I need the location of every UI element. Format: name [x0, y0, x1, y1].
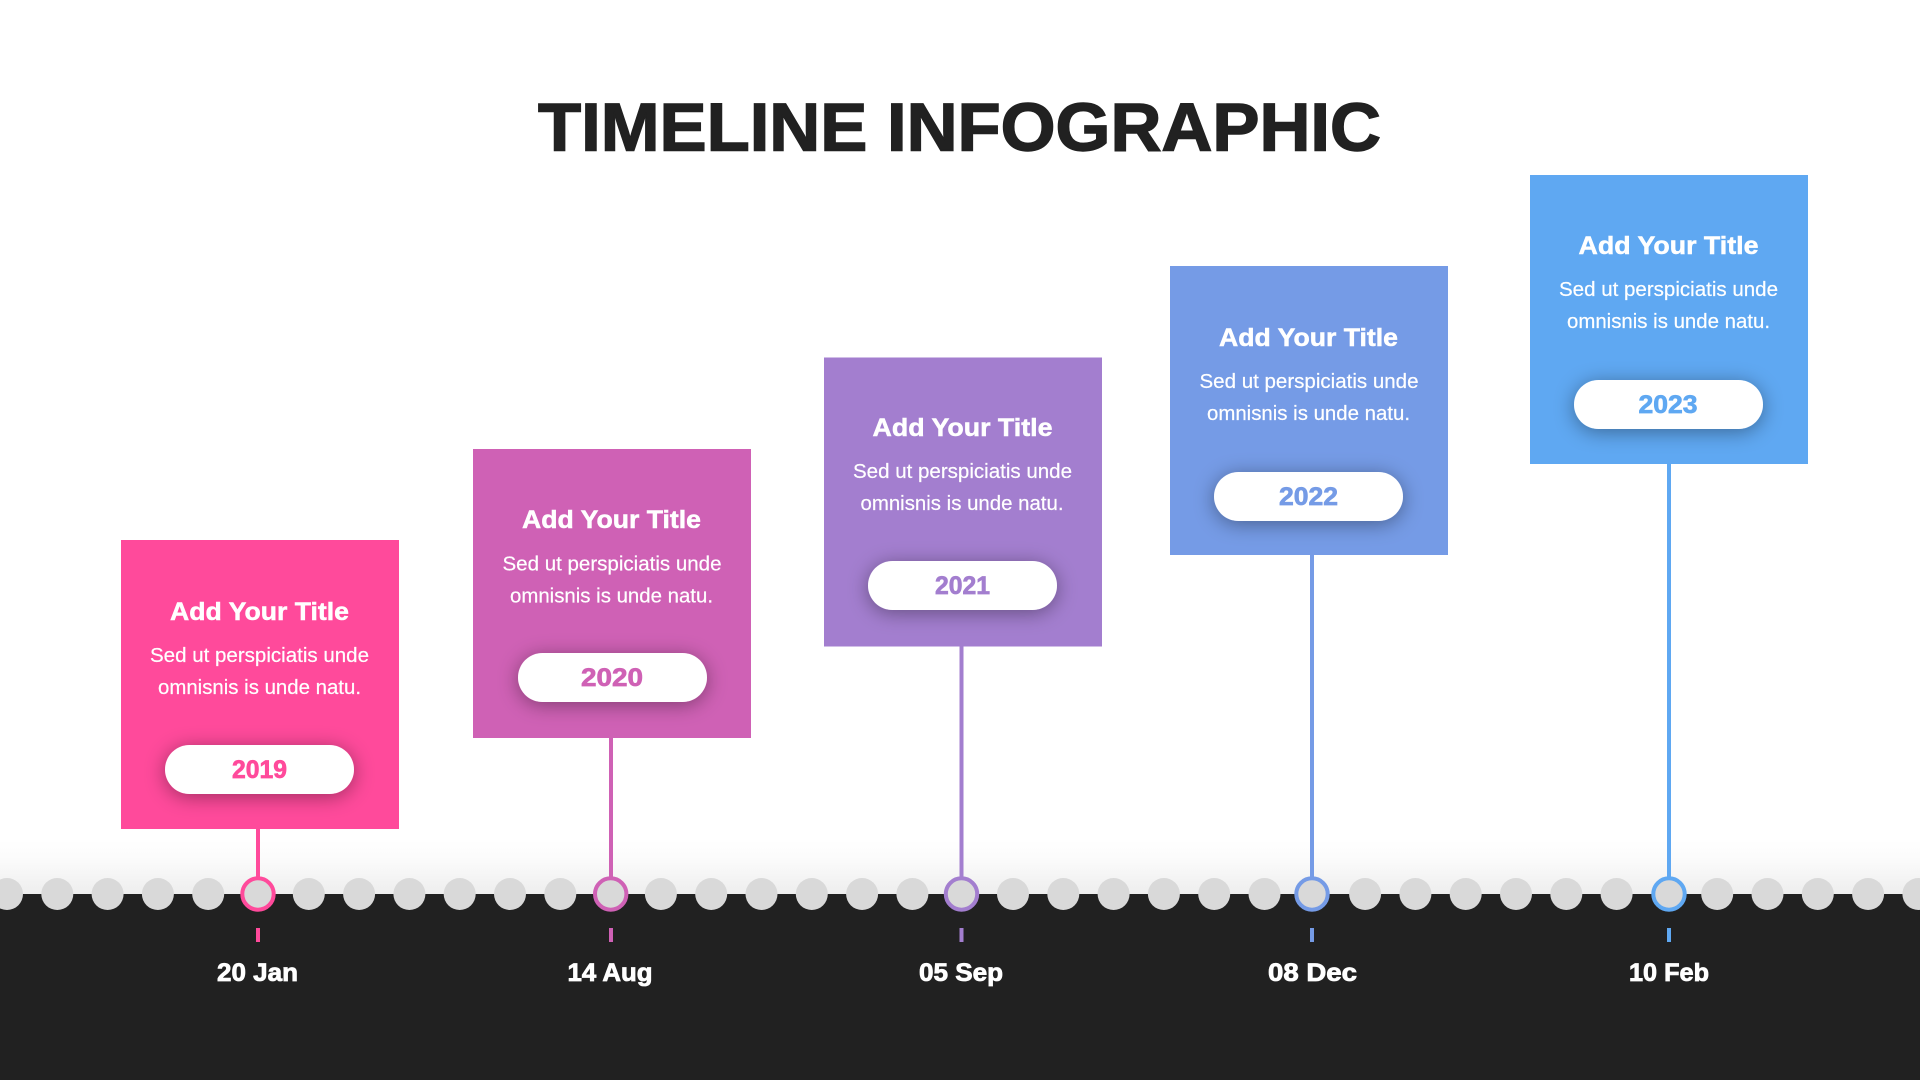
connector 2020	[609, 738, 613, 879]
milestone 2019	[121, 540, 399, 987]
year pill 2019	[165, 745, 354, 794]
card title 2023: Add Your Title	[1578, 232, 1759, 260]
title: TIMELINE INFOGRAPHIC	[538, 90, 1381, 166]
card 2020	[473, 449, 751, 738]
tick 2019	[256, 928, 260, 942]
date 10 Feb: 10 Feb	[1629, 959, 1709, 987]
card description 2019: Sed ut perspiciatis unde	[150, 645, 369, 667]
card description 2023: omnisnis is unde natu.	[1567, 311, 1770, 333]
date 20 Jan: 20 Jan	[217, 959, 298, 987]
card description 2021: omnisnis is unde natu.	[860, 493, 1064, 515]
card description 2020: omnisnis is unde natu.	[510, 586, 713, 608]
card description 2021: Sed ut perspiciatis unde	[853, 461, 1072, 483]
date 14 Aug: 14 Aug	[568, 959, 652, 987]
marker ring 2019	[242, 878, 274, 910]
connector 2019	[256, 829, 260, 879]
tick 2021	[960, 928, 964, 942]
year 2021: 2021	[935, 572, 990, 600]
year 2020: 2020	[581, 664, 643, 692]
tick 2020	[609, 928, 613, 942]
connector 2022	[1310, 555, 1314, 879]
card 2019	[121, 540, 399, 829]
marker ring 2023	[1653, 878, 1685, 910]
card description 2022: omnisnis is unde natu.	[1207, 403, 1410, 425]
card description 2019: omnisnis is unde natu.	[158, 677, 361, 699]
milestone 2022	[1170, 266, 1448, 987]
milestone 2020	[473, 449, 751, 987]
card description 2023: Sed ut perspiciatis unde	[1559, 279, 1778, 301]
card 2022	[1170, 266, 1448, 555]
date 05 Sep: 05 Sep	[919, 959, 1003, 987]
card description 2022: Sed ut perspiciatis unde	[1200, 371, 1418, 393]
year 2019: 2019	[232, 756, 287, 784]
date 08 Dec: 08 Dec	[1268, 959, 1357, 987]
card title 2020: Add Your Title	[522, 506, 701, 534]
marker ring 2021	[946, 878, 977, 910]
dark timeline band	[0, 894, 1920, 1080]
milestone 2021	[824, 358, 1102, 987]
year 2022: 2022	[1279, 483, 1338, 511]
year pill 2020	[518, 653, 707, 702]
card description 2020: Sed ut perspiciatis unde	[502, 554, 722, 576]
tick 2022	[1310, 928, 1314, 942]
year 2023: 2023	[1638, 391, 1698, 419]
card 2023	[1530, 175, 1808, 464]
timeline dots	[0, 878, 1920, 910]
year pill 2021	[868, 561, 1057, 610]
card title 2022: Add Your Title	[1219, 324, 1398, 352]
card title 2021: Add Your Title	[872, 414, 1053, 442]
year pill 2023	[1574, 380, 1763, 429]
marker ring 2020	[595, 878, 626, 910]
milestone 2023	[1530, 175, 1808, 987]
card title 2019: Add Your Title	[170, 598, 349, 626]
connector 2021	[960, 646, 964, 879]
card 2021	[824, 358, 1102, 646]
year pill 2022	[1214, 472, 1403, 521]
tick 2023	[1667, 928, 1671, 942]
marker ring 2022	[1296, 878, 1328, 910]
connector 2023	[1667, 464, 1671, 879]
fade above timeline band	[0, 840, 1920, 894]
